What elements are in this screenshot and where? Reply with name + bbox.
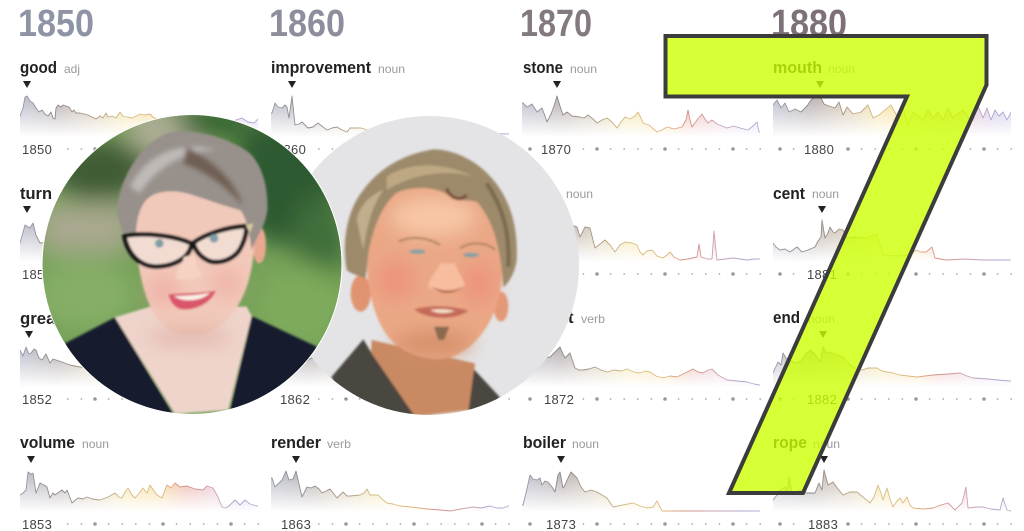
panel: 1871 [566, 192, 761, 276]
sparkline: cent [770, 220, 1014, 262]
panel: great 1852 [20, 315, 259, 404]
panel: rope 1883: rope [773, 434, 807, 452]
panel: volume 1853 [17, 434, 261, 531]
panel: volume 1853: volume [20, 434, 75, 452]
panel: cent 1881: 1881 [807, 267, 837, 282]
panel: cent 1881: noun [812, 187, 839, 201]
panel: render 1863: render [271, 434, 322, 452]
panel: turn 1851: turn [20, 185, 52, 203]
panel: stone 1870 [519, 59, 763, 157]
decade heading: 1880: 1880 [771, 3, 847, 45]
panel: boiler 1873: boiler [523, 434, 567, 452]
sparkline: good [20, 96, 258, 133]
panel: mouth 1880: mouth [773, 59, 822, 77]
panel: mouth 1880 [770, 59, 1014, 157]
sparkline: volume [17, 472, 261, 512]
panel: great 1852: 1852 [22, 392, 52, 407]
panel: end 1882 [770, 309, 1014, 407]
sparkline: improvement [268, 96, 512, 137]
sparkline: turn [20, 222, 44, 257]
panel: improvement 1860 [268, 59, 512, 157]
decade heading: 1860: 1860 [269, 3, 345, 45]
sparkline: 1871 [573, 225, 760, 260]
panel: 1862 [281, 358, 510, 404]
decade heading: 1850: 1850 [18, 3, 94, 45]
panel: stone 1870: noun [570, 62, 597, 76]
sparkline: 1862 [286, 358, 336, 382]
panel: mouth 1880: noun [828, 62, 855, 76]
sparkline: stone [519, 96, 763, 137]
sparkline: rope [770, 470, 1014, 512]
portrait: woman [42, 115, 342, 414]
panel: good 1850: adj [64, 62, 80, 76]
panel: render 1863: verb [327, 437, 351, 451]
panel: render 1863 [268, 434, 512, 531]
panel: good 1850: 1850 [22, 142, 52, 157]
panel: improvement 1860: 1860 [276, 142, 306, 157]
sparkline: 1872 [519, 347, 763, 387]
panel: 1862: 1862 [280, 392, 310, 407]
panel: turn 1851: 1851 [22, 267, 52, 282]
panel: boiler 1873: noun [572, 437, 599, 451]
big numeral 7 [666, 36, 986, 493]
panel: stone 1870: stone [523, 59, 563, 77]
sparkline: boiler [519, 472, 763, 512]
panel: great 1852: great [20, 310, 62, 328]
panel: rope 1883 [770, 434, 1014, 531]
panel: cent 1881: cent [773, 185, 805, 203]
panel: turn 1851 [20, 188, 52, 279]
panel: 1872 [519, 309, 763, 407]
panel: end 1882: end [773, 309, 800, 327]
portrait: man [311, 116, 579, 415]
panel: 1871: noun [566, 187, 593, 201]
panel: mouth 1880: 1880 [804, 142, 834, 157]
sparkline: end [770, 347, 1014, 387]
panel: cent 1881 [770, 185, 1014, 282]
sparkline: great [20, 346, 98, 382]
panel: 1872: t [568, 309, 574, 327]
panel: good 1850 [17, 59, 261, 157]
panel: end 1882: 1882 [807, 392, 837, 407]
panel: good 1850: good [20, 59, 57, 77]
sparkline: render [268, 471, 512, 512]
panel: volume 1853: noun [82, 437, 109, 451]
panel: 1872: 1872 [544, 392, 574, 407]
panel: rope 1883: noun [813, 437, 840, 451]
panel: boiler 1873 [519, 434, 763, 531]
panel: stone 1870: 1870 [541, 142, 571, 157]
panel: end 1882: noun [808, 312, 835, 326]
portrait divider [42, 114, 342, 414]
sparkline: mouth [773, 98, 1011, 133]
panel: improvement 1860: noun [378, 62, 405, 76]
panel: improvement 1860: improvement [271, 59, 371, 77]
decade heading: 1870: 1870 [520, 3, 592, 45]
panel: 1872: verb [581, 312, 605, 326]
